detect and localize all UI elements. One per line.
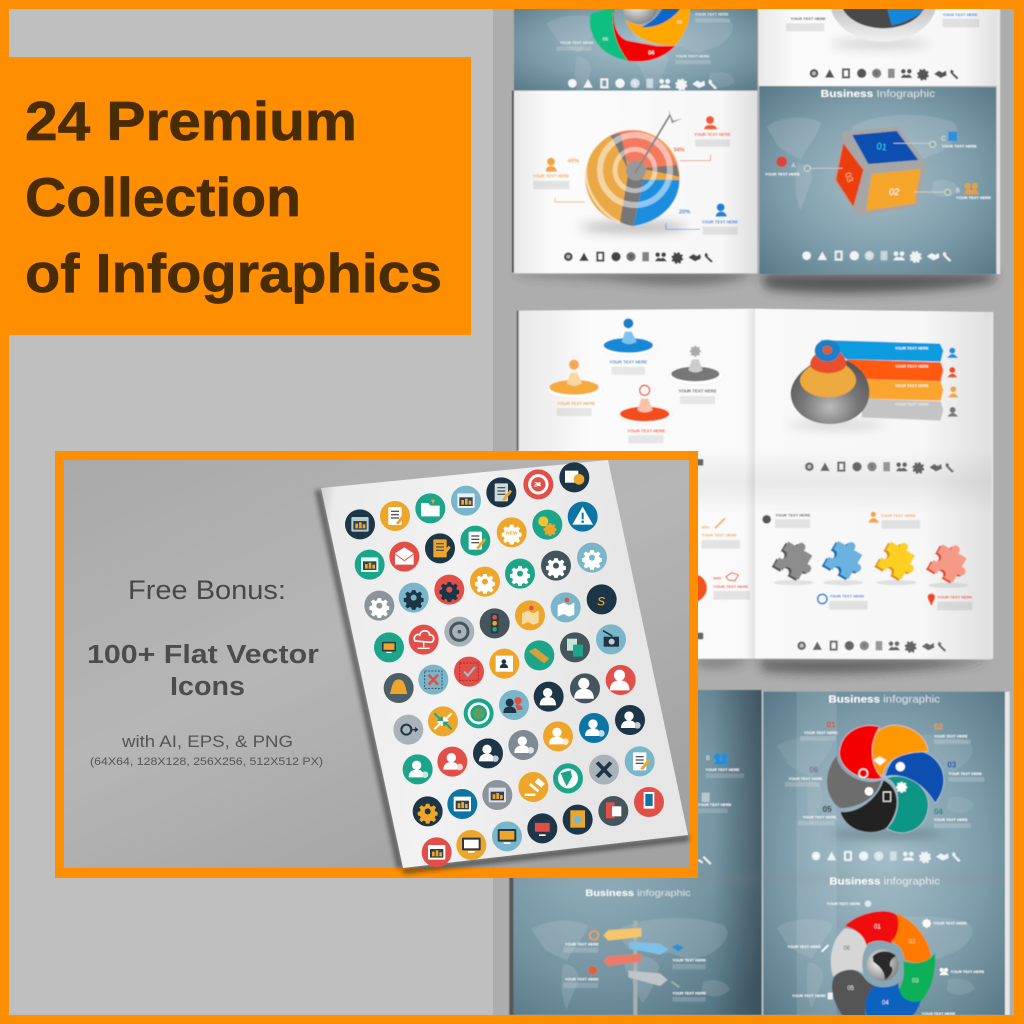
- signpost chart: YOUR TEXT HERE: [565, 942, 599, 946]
- cone chart: YOUR TEXT HERE: [609, 360, 647, 365]
- pinwheel chart heading: Business infographic: [828, 694, 940, 705]
- pinwheel chart: YOUR TEXT HERE: [934, 734, 968, 738]
- signpost chart: YOUR TEXT HERE: [565, 977, 599, 981]
- teal page with 3D cube: [759, 10, 1000, 274]
- white page with target chart: 20%: [679, 210, 690, 216]
- teal page with 3D cube: 02: [889, 187, 900, 197]
- partial teal page labels: YOUR TEXT HERE: [698, 803, 732, 807]
- puzzle labels: YOUR TEXT HERE: [937, 594, 973, 599]
- puzzle pieces: [772, 535, 975, 588]
- pinwheel chart: YOUR TEXT HERE: [804, 731, 838, 735]
- layered cone with ribbons: YOUR TEXT HERE: [895, 364, 929, 368]
- brochure spread 1: [512, 0, 1000, 293]
- pinwheel chart: YOUR TEXT HERE: [803, 815, 837, 819]
- pinwheel chart: [785, 720, 984, 837]
- six-part ring chart with globe: 06: [843, 946, 851, 952]
- partial teal page labels: YOUR TEXT HERE: [706, 768, 740, 772]
- icon row 8: [413, 746, 655, 826]
- icon row 9: [422, 787, 664, 867]
- signpost chart: YOUR TEXT HERE: [672, 959, 706, 963]
- pinwheel chart: 04: [934, 807, 943, 816]
- partial teal page labels: [698, 753, 744, 864]
- teal page with swirl chart: 05: [603, 37, 608, 43]
- teal page with swirl chart: 03: [677, 19, 682, 25]
- teal page with swirl chart: 04: [648, 51, 654, 57]
- white page with target chart: YOUR TEXT HERE: [533, 174, 569, 179]
- white page with target chart: YOUR TEXT HERE: [694, 132, 731, 137]
- white page with ring chart: YOUR TEXT HERE: [943, 12, 978, 17]
- pinwheel chart: YOUR TEXT HERE: [948, 772, 982, 776]
- puzzle labels: YOUR TEXT HERE: [702, 533, 737, 538]
- panel: free bonus icons: [55, 451, 698, 878]
- partial teal page labels: B: [706, 756, 710, 762]
- teal page with swirl chart: YOUR TEXT HERE: [695, 12, 729, 16]
- bonus text: (64X64, 128X128, 256X256, 512X512 PX): [90, 756, 323, 768]
- teal page with 3D cube: YOUR TEXT HERE: [942, 143, 977, 148]
- teal page with 3D cube: A: [791, 163, 795, 169]
- six-part ring chart with globe: YOUR TEXT HERE: [787, 945, 821, 949]
- six-part ring chart with globe: YOUR TEXT HERE: [792, 994, 826, 998]
- teal page with 3D cube: YOUR TEXT HERE: [956, 195, 991, 200]
- signpost chart: YOUR TEXT HERE: [672, 992, 706, 996]
- brochure spread 3: [509, 690, 1010, 1017]
- icon row 7: [403, 705, 645, 784]
- pinwheel chart: YOUR TEXT HERE: [934, 818, 968, 822]
- pinwheel chart: 02: [934, 722, 943, 731]
- bonus text: with AI, EPS, & PNG: [121, 733, 293, 751]
- six-part ring chart with globe: 04: [882, 1000, 889, 1006]
- layered cone with ribbons: YOUR TEXT HERE: [895, 347, 929, 351]
- brochure spread 2: [517, 309, 993, 673]
- six-part ring chart with globe: 05: [847, 986, 855, 992]
- title block: Collection: [25, 166, 301, 228]
- cube heading: Business Infographic: [821, 89, 935, 100]
- photo collage: infographic brochure spreads: [509, 0, 1010, 1017]
- layered cone with ribbons: YOUR TEXT HERE: [895, 403, 929, 407]
- title block: of Infographics: [25, 242, 442, 304]
- pinwheel chart: 05: [823, 805, 832, 814]
- puzzle labels: 60%: [702, 525, 710, 530]
- title block: [9, 57, 471, 335]
- six-part ring chart with globe: 03: [912, 979, 919, 985]
- teal page with swirl chart: YOUR TEXT HERE: [560, 41, 594, 45]
- white page with target chart: [512, 91, 757, 273]
- layered cone with ribbons: YOUR TEXT HERE: [895, 384, 929, 388]
- icon row 5: [384, 624, 626, 703]
- cone chart: YOUR TEXT HERE: [627, 429, 665, 434]
- puzzle labels: [697, 512, 973, 610]
- puzzle labels: 34%: [713, 575, 722, 580]
- pinwheel chart: 03: [947, 761, 957, 770]
- puzzle labels: YOUR TEXT HERE: [881, 513, 916, 518]
- cone chart: YOUR TEXT HERE: [679, 389, 717, 394]
- teal page with swirl chart: [514, 0, 757, 100]
- title block: 24 Premium: [25, 90, 357, 152]
- white page with ring chart: [758, 0, 1000, 86]
- six-part ring chart with globe: 02: [909, 939, 916, 945]
- photo collage background: [493, 0, 1024, 1024]
- teal page with 3D cube: 01: [876, 141, 888, 152]
- signpost heading: Business infographic: [585, 888, 691, 898]
- six-part ring chart with globe: YOUR TEXT HERE: [827, 902, 861, 906]
- six-part ring chart with globe: YOUR TEXT HERE: [922, 1012, 956, 1016]
- bonus text: 100+ Flat Vector: [87, 641, 319, 669]
- icon row 6: [393, 665, 636, 745]
- icon booklet: [318, 460, 689, 871]
- teal page with swirl chart: YOUR TEXT HERE: [676, 54, 710, 58]
- teal page with 3D cube: B: [956, 189, 960, 195]
- ring chart heading: Business infographic: [829, 876, 940, 887]
- white page with ring chart: YOUR TEXT HERE: [791, 16, 826, 21]
- six-part ring chart with globe: 01: [874, 924, 881, 930]
- icon row 2: [355, 502, 598, 580]
- pinwheel chart: 01: [827, 720, 836, 729]
- white page with target chart: 34%: [673, 147, 685, 153]
- six-part ring chart with globe: YOUR TEXT HERE: [933, 922, 967, 926]
- icon row 1: [345, 462, 589, 539]
- layered cone with ribbons: [788, 340, 959, 428]
- teal page with 3D cube: YOUR TEXT HERE: [765, 171, 800, 176]
- icon row 2: NEW: [506, 530, 518, 536]
- teal page with 3D cube: C: [941, 137, 946, 143]
- six-part ring chart with globe: [787, 900, 985, 1017]
- puzzle labels: YOUR TEXT HERE: [829, 594, 865, 599]
- signpost chart: [563, 921, 706, 1016]
- icon row 3: [364, 543, 607, 621]
- teal page with 3D cube: 03: [843, 171, 856, 184]
- pinwheel chart: 06: [809, 765, 819, 774]
- cone chart: YOUR TEXT HERE: [557, 401, 595, 406]
- puzzle labels: YOUR TEXT HERE: [775, 512, 811, 517]
- bonus text: Free Bonus:: [128, 575, 286, 605]
- icon row 1: 24: [534, 482, 542, 489]
- bonus text: Icons: [170, 673, 245, 701]
- icon row 4: s: [597, 592, 605, 609]
- icon row 4: [374, 584, 617, 662]
- pinwheel chart: YOUR TEXT HERE: [789, 777, 823, 781]
- puzzle labels: YOUR TEXT HERE: [713, 584, 749, 589]
- cone chart: [548, 318, 723, 443]
- white page with target chart: YOUR TEXT HERE: [702, 219, 738, 224]
- six-part ring chart with globe: YOUR TEXT HERE: [951, 970, 985, 974]
- bonus text: [87, 575, 323, 768]
- white page with target chart: 40%: [568, 159, 579, 165]
